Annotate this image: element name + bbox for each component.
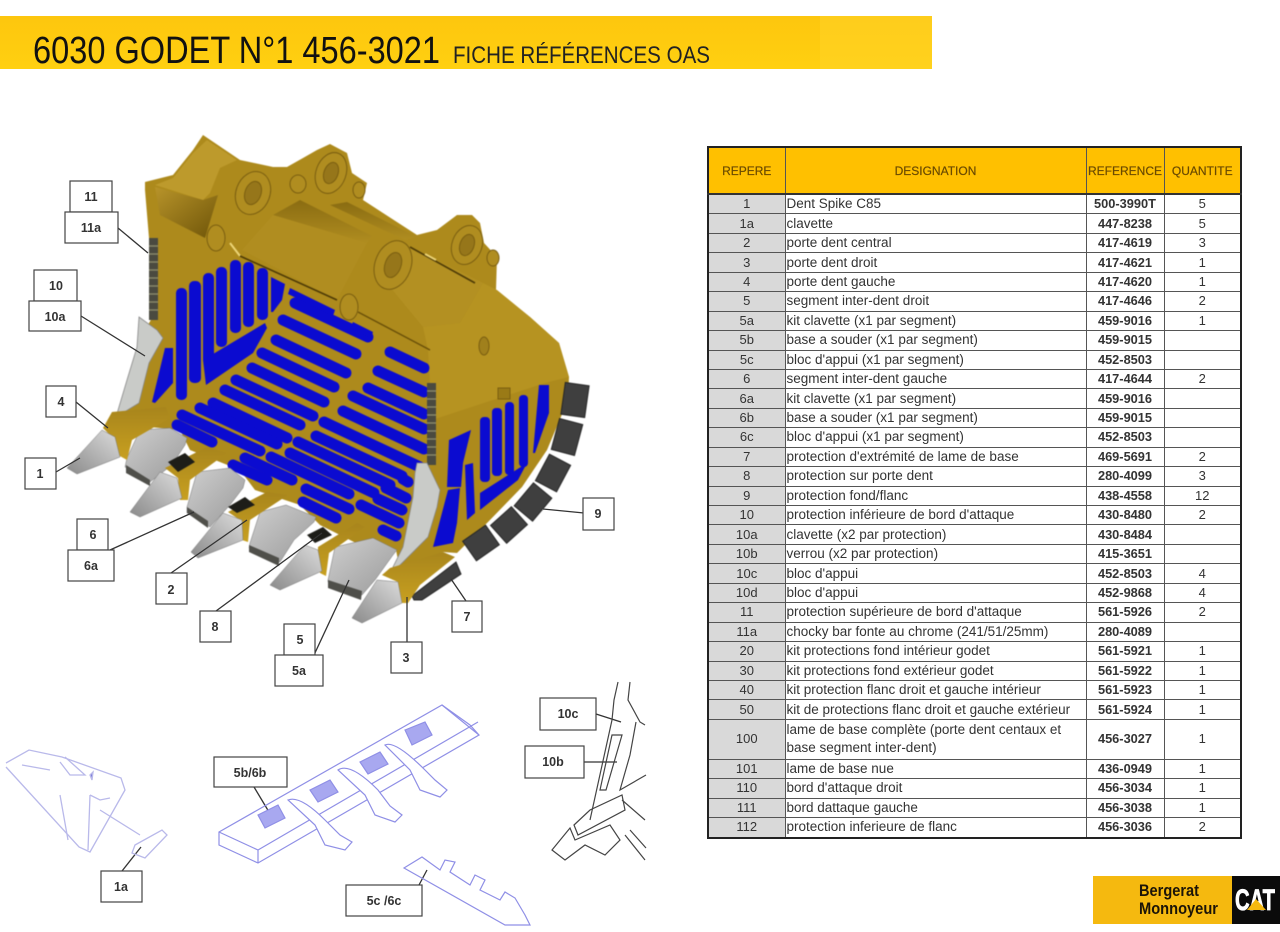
callout boxes: 7 (464, 610, 471, 624)
parts reference table: 6b (740, 410, 754, 425)
parts reference table: 111 (737, 800, 757, 815)
parts reference table: 7 (743, 449, 750, 464)
parts reference table: lame de base complète (porte dent centaux et (786, 722, 1061, 737)
parts reference table: REFERENCE (1088, 164, 1162, 178)
callout boxes: 11 (84, 190, 98, 204)
parts reference table: bord dattaque gauche (786, 800, 918, 815)
parts reference table: 469-5691 (1098, 449, 1152, 464)
logo: Bergerat Monnoyeur CAT (1093, 876, 1280, 924)
parts reference table: 447-8238 (1098, 216, 1152, 231)
parts reference table: bloc d'appui (x1 par segment) (786, 429, 964, 444)
parts reference table: base a souder (x1 par segment) (786, 410, 978, 425)
parts reference table: 5a (740, 313, 754, 328)
parts reference table: 415-3651 (1098, 546, 1152, 561)
parts reference table: bord d'attaque droit (786, 780, 902, 795)
callout boxes: 5b/6b (234, 766, 267, 780)
parts reference table: 436-0949 (1098, 761, 1152, 776)
parts reference table: 456-3034 (1098, 780, 1152, 795)
parts reference table: 2 (1199, 293, 1206, 308)
parts reference table: 10a (736, 527, 758, 542)
callout boxes: 4 (58, 395, 65, 409)
parts reference table: kit clavette (x1 par segment) (786, 313, 956, 328)
parts reference table: 10c (736, 566, 757, 581)
parts reference table: 1 (1199, 761, 1206, 776)
parts reference table: protection sur porte dent (786, 468, 933, 483)
parts reference table: 280-4089 (1098, 624, 1152, 639)
parts reference table: 5 (1199, 216, 1206, 231)
parts reference table: 1 (1199, 682, 1206, 697)
parts reference table: 500-3990T (1094, 196, 1156, 211)
parts reference table: 4 (1199, 585, 1206, 600)
title banner: 6030 GODET N°1 456-3021 (33, 30, 440, 72)
parts reference table: kit protection flanc droit et gauche intérieur (786, 682, 1041, 697)
parts reference table: 5c (740, 352, 754, 367)
parts reference table: 3 (1199, 235, 1206, 250)
parts reference table: 4 (1199, 566, 1206, 581)
parts reference table: protection inferieure de flanc (786, 819, 957, 834)
parts reference table: 11a (736, 624, 757, 639)
parts reference table: 6 (743, 371, 750, 386)
callout boxes: 5c /6c (367, 894, 401, 908)
logo: Bergerat Monnoyeur CAT: Bergerat (1139, 881, 1199, 900)
parts reference table: 561-5926 (1098, 604, 1152, 619)
parts reference table: 1 (1199, 313, 1206, 328)
parts reference table: 5 (743, 293, 750, 308)
parts reference table: 430-8480 (1098, 507, 1152, 522)
parts reference table: REPERE (722, 164, 771, 178)
parts reference table: 2 (1199, 449, 1206, 464)
parts reference table: 452-8503 (1098, 352, 1152, 367)
parts reference table: 6c (740, 429, 754, 444)
line art: base edge (219, 705, 530, 925)
callout leaders (56, 228, 621, 885)
parts reference table: base a souder (x1 par segment) (786, 332, 978, 347)
callout boxes: 10c (558, 707, 578, 721)
logo: Bergerat Monnoyeur CAT: Monnoyeur (1139, 899, 1218, 918)
parts reference table: 561-5924 (1098, 702, 1152, 717)
parts reference table: porte dent central (786, 235, 892, 250)
parts reference table: protection fond/flanc (786, 488, 908, 503)
parts reference table: 5 (1199, 196, 1206, 211)
bucket body (67, 135, 589, 623)
parts reference table: 2 (743, 235, 750, 250)
parts reference table: 11 (740, 604, 754, 619)
parts reference table (707, 146, 1242, 839)
parts reference table: 417-4621 (1098, 255, 1152, 270)
parts reference table: 1a (740, 216, 754, 231)
parts reference table: 561-5921 (1098, 643, 1152, 658)
parts reference table: 1 (1199, 702, 1206, 717)
parts reference table: 459-9016 (1098, 313, 1152, 328)
parts reference table: porte dent gauche (786, 274, 895, 289)
parts reference table: 3 (743, 255, 750, 270)
parts reference table: kit protections fond extérieur godet (786, 663, 994, 678)
parts reference table: chocky bar fonte au chrome (241/51/25mm) (786, 624, 1048, 639)
parts reference table: 1 (1199, 643, 1206, 658)
parts reference table: 20 (740, 643, 754, 658)
parts reference table: 9 (743, 488, 750, 503)
parts reference table: 1 (1199, 800, 1206, 815)
parts reference table: verrou (x2 par protection) (786, 546, 938, 561)
top channel and pocket (155, 140, 237, 200)
parts reference table: 452-8503 (1098, 566, 1152, 581)
parts reference table: 417-4620 (1098, 274, 1152, 289)
parts reference table: 2 (1199, 507, 1206, 522)
parts reference table: 2 (1199, 819, 1206, 834)
chocky bars (149, 238, 436, 465)
parts reference table: 1 (1199, 255, 1206, 270)
parts reference table: 10b (736, 546, 758, 561)
parts reference table: 3 (1199, 468, 1206, 483)
callout boxes: 5 (297, 633, 304, 647)
parts reference table: Dent Spike C85 (786, 196, 881, 211)
parts reference table: 417-4646 (1098, 293, 1152, 308)
hinge rings and lugs (207, 148, 510, 399)
parts reference table: bloc d'appui (786, 566, 858, 581)
callout boxes: 1a (114, 880, 129, 894)
parts reference table: kit protections fond intérieur godet (786, 643, 990, 658)
parts reference table: 459-9015 (1098, 410, 1152, 425)
protection blocks (412, 382, 589, 600)
parts reference table: 6a (740, 391, 754, 406)
side wear plates (116, 317, 440, 568)
parts reference table: protection inférieure de bord d'attaque (786, 507, 1014, 522)
parts reference table: 5b (740, 332, 754, 347)
parts reference table: clavette (786, 216, 833, 231)
callout boxes: 2 (168, 583, 175, 597)
parts reference table: porte dent droit (786, 255, 877, 270)
parts reference table: protection d'extrémité de lame de base (786, 449, 1019, 464)
parts reference table: 10d (736, 585, 758, 600)
blue wear panels: floor slats (177, 303, 424, 536)
callout boxes: 1 (37, 467, 44, 481)
parts reference table: 110 (736, 780, 757, 795)
parts reference table: 30 (740, 663, 754, 678)
parts reference table: 459-9015 (1098, 332, 1152, 347)
parts reference table: 4 (743, 274, 750, 289)
callout boxes: 6 (90, 528, 97, 542)
parts reference table: 456-3038 (1098, 800, 1152, 815)
parts reference table: 417-4644 (1098, 371, 1152, 386)
parts reference table: 2 (1199, 371, 1206, 386)
line art: tooth and pin (6, 750, 167, 858)
tooth adapters (103, 407, 455, 603)
shadow and highlight under cylinders (230, 243, 475, 350)
parts reference table: 417-4619 (1098, 235, 1152, 250)
teeth (67, 430, 402, 623)
parts reference table: 1 (1199, 780, 1206, 795)
parts reference table: 1 (1199, 274, 1206, 289)
parts reference table: kit clavette (x1 par segment) (786, 391, 956, 406)
parts reference table: 12 (1195, 488, 1209, 503)
callout boxes: 3 (403, 651, 410, 665)
parts reference table: 1 (743, 196, 750, 211)
parts reference table: 459-9016 (1098, 391, 1152, 406)
callout boxes: 6a (84, 559, 99, 573)
parts reference table: 112 (736, 819, 757, 834)
title banner: FICHE RÉFÉRENCES OAS (453, 42, 710, 69)
tooth clips (168, 453, 332, 543)
parts reference table: lame de base nue (786, 761, 894, 776)
parts reference table: base segment inter-dent) (786, 740, 937, 755)
parts reference table: 561-5923 (1098, 682, 1152, 697)
callout boxes: 8 (212, 620, 219, 634)
parts reference table: 10 (740, 507, 754, 522)
callout boxes: 5a (292, 664, 307, 678)
segment guards (125, 428, 397, 595)
parts reference table: 452-9868 (1098, 585, 1152, 600)
parts reference table: segment inter-dent gauche (786, 371, 947, 386)
parts reference table: clavette (x2 par protection) (786, 527, 946, 542)
callout boxes: 11a (81, 221, 102, 235)
parts reference table: 1 (1199, 663, 1206, 678)
blue wear panels: outer flank (533, 385, 549, 453)
parts reference table: 101 (736, 761, 758, 776)
parts reference table: 452-8503 (1098, 429, 1152, 444)
parts reference table: QUANTITE (1172, 164, 1233, 178)
parts reference table: 561-5922 (1098, 663, 1152, 678)
callout boxes: 10a (45, 310, 66, 324)
parts reference table: 438-4558 (1098, 488, 1152, 503)
parts reference table: 1 (1199, 731, 1206, 746)
callout boxes: 10 (49, 279, 63, 293)
parts reference table: bloc d'appui (x1 par segment) (786, 352, 964, 367)
parts reference table: 430-8484 (1098, 527, 1152, 542)
parts reference table: DESIGNATION (895, 164, 976, 178)
parts reference table: 280-4099 (1098, 468, 1152, 483)
top cylinders (273, 200, 372, 243)
parts reference table: 8 (743, 468, 750, 483)
parts reference table: kit de protections flanc droit et gauche extérieur (786, 702, 1070, 717)
parts reference table: 456-3036 (1098, 819, 1152, 834)
parts reference table: 100 (736, 731, 758, 746)
parts reference table: 50 (740, 702, 754, 717)
blue wear panels: left inner wall (152, 260, 549, 547)
line art: wear plate detail (552, 682, 646, 860)
callout boxes (25, 181, 614, 916)
parts reference table: 2 (1199, 604, 1206, 619)
guard undersides (126, 465, 362, 600)
parts reference table: bloc d'appui (786, 585, 858, 600)
callout boxes: 10b (542, 755, 564, 769)
title banner (0, 16, 932, 72)
parts reference table: 40 (740, 682, 754, 697)
parts reference table: segment inter-dent droit (786, 293, 929, 308)
parts reference table: protection supérieure de bord d'attaque (786, 604, 1022, 619)
parts reference table: 456-3027 (1098, 731, 1152, 746)
callout boxes: 9 (595, 507, 602, 521)
